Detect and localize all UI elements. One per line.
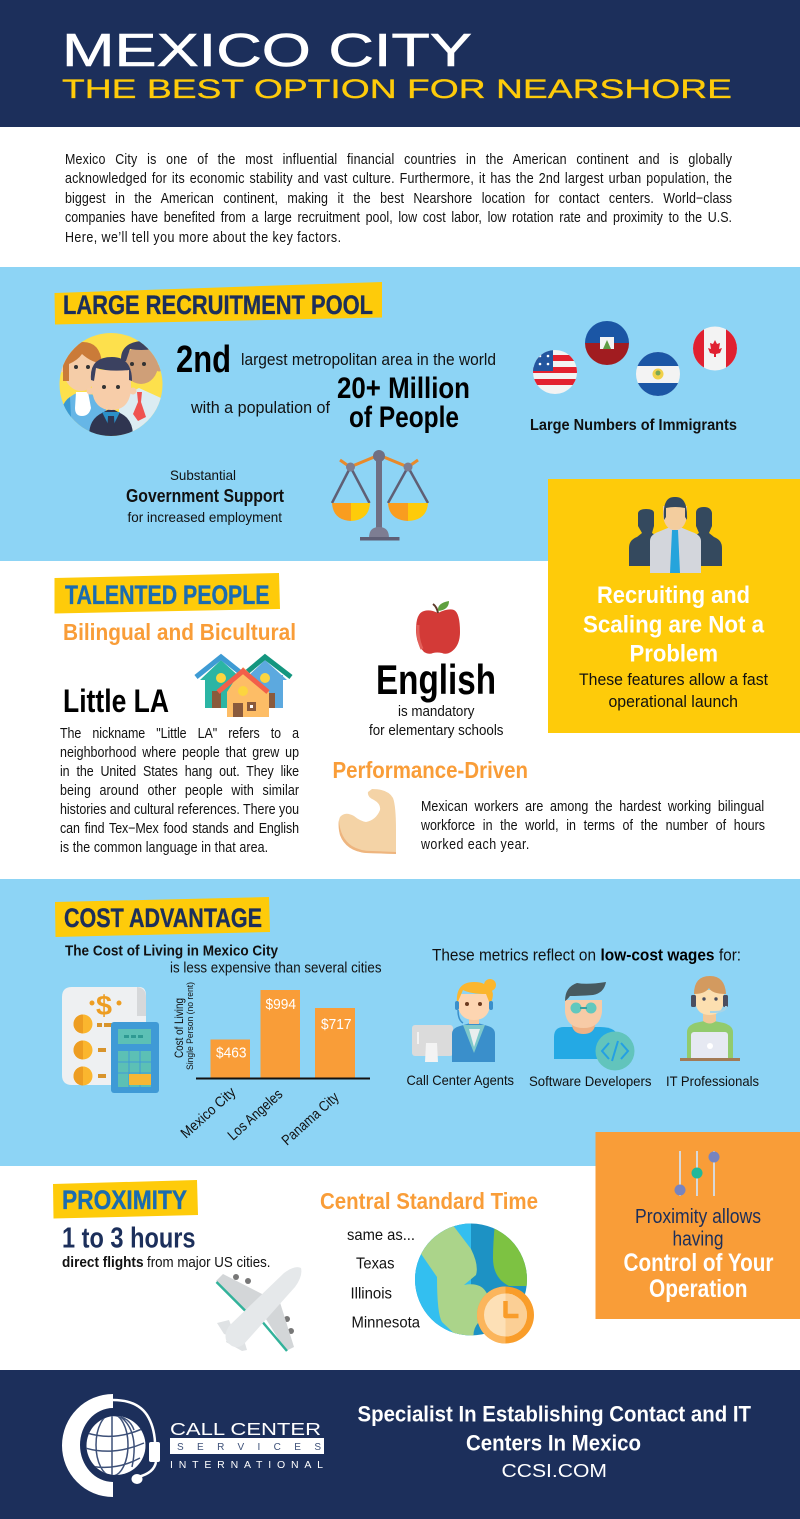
text block: little la description: in the United States hang out. They like xyxy=(60,763,299,779)
flag: United States xyxy=(533,350,577,394)
label: large numbers of immigrants: Large Numbers of Immigrants xyxy=(530,417,737,434)
icon: globe and clock xyxy=(415,1223,534,1344)
panel: header xyxy=(0,0,800,127)
axis title: Cost of Living xyxy=(172,998,186,1058)
logo text: INTERNATIONAL xyxy=(170,1459,323,1471)
callout text: Proximity allows xyxy=(635,1206,761,1228)
bar: Mexico City: $463 xyxy=(216,1044,246,1062)
title: MEXICO CITY xyxy=(62,24,472,76)
text: government support: Government Support xyxy=(126,486,284,506)
text: second largest metropolitan area: largest metropolitan area in the world xyxy=(241,350,496,369)
text: low-cost wages xyxy=(432,946,741,964)
icon: sliders xyxy=(674,1151,720,1196)
category labels xyxy=(178,1084,343,1149)
subheading: performance-driven: Performance-Driven xyxy=(332,757,528,783)
text: second largest metropolitan area: with a population of xyxy=(190,398,330,417)
icon: bill and calculator: $ xyxy=(96,990,112,1021)
logo text: CALL CENTER xyxy=(170,1419,321,1439)
icon: apple xyxy=(416,601,460,654)
icon: bill and calculator xyxy=(62,987,159,1093)
text: cost of living intro xyxy=(65,942,382,976)
text: cost of living intro: The Cost of Living in Mexico City xyxy=(65,942,279,960)
text block: little la description: The nickname "Little LA" refers to a xyxy=(60,725,300,741)
flag: El Salvador xyxy=(636,352,680,397)
icon: software developer xyxy=(554,982,634,1070)
text block: introduction: biggest in the American continent, making it the best Nearshore location for contact centers. World−class xyxy=(65,190,732,206)
callout text xyxy=(579,582,768,711)
text block: little la description: is the common language in that area. xyxy=(60,839,268,855)
heading: cost advantage xyxy=(55,897,270,937)
text: same time zone states: Illinois xyxy=(350,1286,392,1302)
heading: large recruitment pool xyxy=(54,282,382,324)
text block: performance description: worked each year. xyxy=(420,836,529,852)
icon: flags xyxy=(533,321,737,397)
text block: introduction xyxy=(65,151,732,245)
bar: Los Angeles: $994 xyxy=(266,996,296,1013)
icon: three people xyxy=(58,333,164,438)
callout text: operational launch xyxy=(608,692,738,711)
text: low-cost wages: for: xyxy=(719,946,741,964)
text: flight time: direct flights xyxy=(62,1255,144,1271)
category labels: Mexico City xyxy=(178,1084,240,1142)
text: tagline xyxy=(358,1402,752,1456)
text: english is mandatory xyxy=(369,656,504,739)
heading: little la: Little LA xyxy=(63,683,169,719)
text block: little la description: can find Tex−Mex food stands and English xyxy=(60,820,299,836)
text: second largest metropolitan area: 20+ Million xyxy=(337,372,470,405)
heading: talented people xyxy=(54,573,280,614)
heading: large recruitment pool: LARGE RECRUITMENT POOL xyxy=(63,290,373,320)
bar: Panama City: $717 xyxy=(321,1016,352,1033)
text block: introduction: Mexico City is one of the most influential financial countries in the American continent and is globally xyxy=(65,151,732,167)
woman xyxy=(58,342,102,391)
bar: Los Angeles xyxy=(260,990,300,1078)
logo: call center services international xyxy=(62,1394,324,1497)
text block: little la description: neighborhood where people that grew up xyxy=(60,744,299,760)
text: cost of living intro: is less expensive than several cities xyxy=(170,960,382,976)
label: call center agents: Call Center Agents xyxy=(406,1072,514,1088)
callout: recruiting and scaling xyxy=(548,479,800,733)
text: government support xyxy=(126,467,284,525)
heading: talented people: TALENTED PEOPLE xyxy=(65,580,270,610)
text block: introduction: acknowledged for its economic stability and vast culture. Furthermore, it has the 2nd largest urban population, the xyxy=(65,170,732,186)
text: second largest metropolitan area: 2nd xyxy=(176,339,231,381)
text: same time zone states: Minnesota xyxy=(352,1314,420,1332)
icon: flexed arm xyxy=(338,789,396,854)
text block: introduction: companies have benefited from a large recruitment pool, low cost labor, low rotation rate and proximity to the U.S. xyxy=(65,209,732,225)
subheading: central standard time: Central Standard Time xyxy=(320,1188,538,1214)
callout text: Scaling are Not a xyxy=(583,612,765,638)
text: low-cost wages: low-cost wages xyxy=(600,946,714,964)
icon: balance scale xyxy=(332,450,428,540)
text: flight time xyxy=(62,1222,270,1271)
axis title: Single Person (no rent) xyxy=(185,982,195,1070)
text block: performance description: workforce in the world, in terms of the number of hours xyxy=(420,817,765,833)
text: tagline: Specialist In Establishing Contact and IT xyxy=(358,1402,752,1426)
category labels: Los Angeles xyxy=(225,1087,286,1144)
label: software developers: Software Developers xyxy=(529,1073,652,1089)
flag: Haiti xyxy=(585,321,629,365)
icon: call center agent xyxy=(412,979,496,1062)
heading: proximity: PROXIMITY xyxy=(62,1185,187,1215)
text block: little la description xyxy=(60,725,300,855)
panel: cost advantage xyxy=(0,879,800,1166)
text block: performance description xyxy=(420,798,765,852)
text: english is mandatory: is mandatory xyxy=(398,704,475,720)
logo text: SERVICES xyxy=(177,1442,321,1453)
bar: Panama City xyxy=(315,1008,355,1078)
icon: houses xyxy=(196,657,291,717)
callout: control of your operation xyxy=(596,1132,800,1319)
heading: proximity xyxy=(53,1180,198,1218)
callout text: having xyxy=(672,1228,724,1250)
subtitle: THE BEST OPTION FOR NEARSHORE xyxy=(62,74,732,104)
callout text: Operation xyxy=(649,1275,748,1303)
text: flight time: 1 to 3 hours xyxy=(62,1222,196,1254)
panel: footer xyxy=(0,1370,800,1519)
logo mark: globe and headset xyxy=(62,1394,160,1497)
text: tagline: Centers In Mexico xyxy=(466,1430,641,1456)
bar chart: cost of living xyxy=(172,982,370,1149)
logo text xyxy=(170,1419,324,1471)
text: low-cost wages: These metrics reflect on xyxy=(432,946,596,964)
subheading: bilingual and bicultural: Bilingual and Bicultural xyxy=(63,619,296,645)
heading: cost advantage: COST ADVANTAGE xyxy=(64,903,262,933)
bar: Mexico City xyxy=(210,1040,250,1078)
text: same time zone states xyxy=(347,1227,420,1332)
icon: business people xyxy=(629,497,722,573)
flag: Canada xyxy=(693,326,737,371)
icon: airplane xyxy=(216,1267,301,1351)
label: IT professionals: IT Professionals xyxy=(666,1073,759,1089)
callout text: Problem xyxy=(630,640,718,668)
text block: little la description: being around other people with similar xyxy=(60,782,300,798)
callout text: Recruiting and xyxy=(597,582,750,609)
text: government support: for increased employment xyxy=(128,509,282,525)
callout text: These features allow a fast xyxy=(579,670,768,689)
text: same time zone states: same as... xyxy=(347,1227,415,1244)
text block: introduction: Here, we’ll tell you more about the key factors. xyxy=(65,229,341,245)
panel: talented people xyxy=(54,573,765,855)
text: second largest metropolitan area xyxy=(176,339,496,434)
icon: IT professional xyxy=(680,976,740,1061)
panel: large recruitment pool xyxy=(0,267,800,561)
category labels: Panama City xyxy=(279,1089,343,1149)
text block: performance description: Mexican workers are among the hardest working bilingual xyxy=(421,798,764,814)
text: government support: Substantial xyxy=(170,467,236,483)
panel: proximity xyxy=(53,1180,538,1351)
text: same time zone states: Texas xyxy=(356,1256,394,1272)
callout text: Control of Your xyxy=(624,1249,774,1277)
man right xyxy=(121,341,161,384)
text: second largest metropolitan area: of People xyxy=(349,401,459,434)
text: flight time: from major US cities. xyxy=(147,1255,270,1271)
callout text xyxy=(624,1206,774,1303)
text block: little la description: histories and cultural references. There you xyxy=(60,801,299,817)
text: english is mandatory: English xyxy=(376,656,496,703)
text: english is mandatory: for elementary schools xyxy=(369,723,504,739)
axis title xyxy=(172,982,195,1070)
text: website: CCSI.COM xyxy=(502,1461,607,1481)
